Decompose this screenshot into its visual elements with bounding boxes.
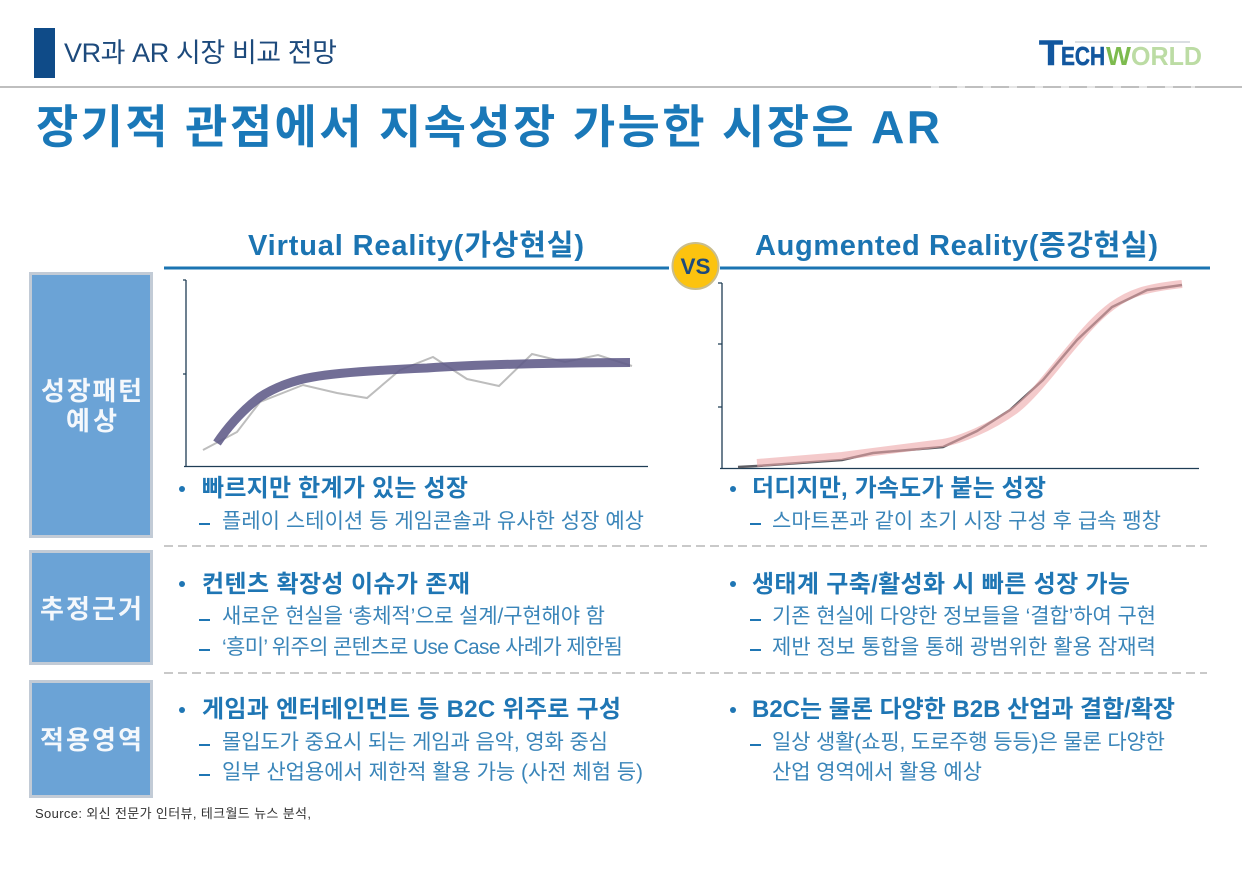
logo: Techworld: ECH [1061,41,1105,71]
panel: application area label [30,682,152,796]
text block: AR rationale: 제반 정보 통합을 통해 광범위한 활용 잠재력 [772,636,1156,659]
text block: VR rationale: 새로운 현실을 ‘총체적’으로 설계/구현해야 함 [222,605,605,628]
text block: AR growth [730,475,1161,533]
VS badge: VS [680,254,710,279]
panel: application area label: 적용영역 [40,725,142,755]
panel: rationale label [30,552,152,664]
text block: AR application: 산업 영역에서 활용 예상 [772,761,982,784]
title: 장기적 관점에서 지속성장 가능한 시장은 AR [36,101,940,153]
column heading: Virtual Reality: Virtual Reality(가상현실) [248,229,584,262]
logo: Techworld: ORLD [1131,41,1202,71]
text block: VR growth: 플레이 스테이션 등 게임콘솔과 유사한 성장 예상 [222,510,644,533]
text block: AR application: 일상 생활(쇼핑, 도로주행 등등)은 물론 다양한 [772,731,1165,754]
panel: growth pattern label: 예상 [66,406,117,436]
chart: AR growth curve [718,283,1199,468]
text block: AR application: B2C는 물론 다양한 B2B 산업과 결합/확장 [752,696,1175,723]
header accent bar [34,28,55,78]
text block: AR rationale [730,571,1156,659]
text block: AR rationale: 생태계 구축/활성화 시 빠른 성장 가능 [752,571,1130,598]
chart: VR growth curve [183,280,648,466]
text block: VR rationale [179,571,623,659]
header subtitle: VR과 AR 시장 비교 전망 [64,38,337,68]
panel: rationale label: 추정근거 [40,594,142,624]
text block: VR growth [179,475,644,533]
text block: AR application [730,696,1175,784]
text block: VR application [179,696,643,784]
text block: VR application: 게임과 엔터테인먼트 등 B2C 위주로 구성 [202,696,621,723]
text block: VR application: 일부 산업용에서 제한적 활용 가능 (사전 체험 등) [222,761,643,784]
panel: growth pattern label: 성장패턴 [41,376,142,406]
text block: VR application: 몰입도가 중요시 되는 게임과 음악, 영화 중심 [222,731,608,754]
text block: VR growth: 빠르지만 한계가 있는 성장 [202,475,468,502]
column heading: Augmented Reality: Augmented Reality(증강현실) [755,229,1158,262]
text block: VR rationale: 컨텐츠 확장성 이슈가 존재 [202,571,470,598]
text block: AR rationale: 기존 현실에 다양한 정보들을 ‘결합’하여 구현 [772,605,1156,628]
source note: Source: 외신 전문가 인터뷰, 테크월드 뉴스 분석, [35,806,311,821]
logo: Techworld: T [1039,34,1063,73]
text block: VR rationale: ‘흥미’ 위주의 콘텐츠로 Use Case 사례가 제한됨 [222,636,623,659]
text block: AR growth: 더디지만, 가속도가 붙는 성장 [752,475,1046,502]
VS badge [672,243,718,289]
panel: growth pattern label [30,274,152,536]
logo: Techworld [1039,34,1202,73]
logo: Techworld: W [1106,41,1131,71]
text block: AR growth: 스마트폰과 같이 초기 시장 구성 후 급속 팽창 [772,510,1161,533]
